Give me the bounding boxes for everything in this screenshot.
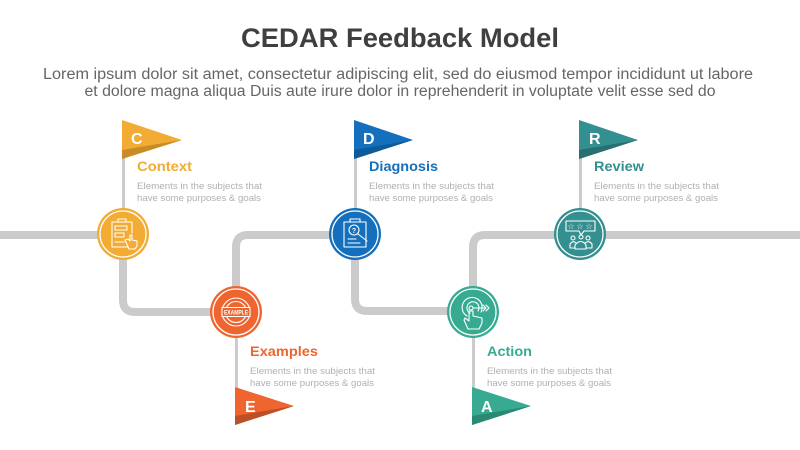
flag C: C (131, 131, 143, 148)
description: Elements in the subjects that (369, 181, 494, 192)
heading Diagnosis: Diagnosis (369, 158, 438, 174)
icon: example stamp: EXAMPLE (224, 310, 249, 316)
icon: clipboard with magnifier: ? (352, 228, 356, 235)
icon: star ratings and people: ☆ (567, 222, 575, 231)
icon: star ratings and people: ☆ (585, 222, 593, 231)
icon: clipboard with hand (97, 208, 149, 260)
icon: star ratings and people: ☆ (576, 222, 584, 231)
flag E (235, 387, 294, 425)
description: have some purposes & goals (594, 193, 718, 204)
description: have some purposes & goals (250, 378, 374, 389)
heading Examples: Examples (250, 343, 318, 359)
flag D: D (363, 131, 375, 148)
description (369, 181, 494, 204)
description: have some purposes & goals (487, 378, 611, 389)
flag A: A (481, 399, 493, 416)
subtitle text block (43, 66, 753, 100)
icon: clipboard with magnifier (329, 208, 381, 260)
icon: target with pointing hand (447, 286, 499, 338)
panel: Action (447, 286, 612, 425)
description (250, 366, 375, 389)
panel: Context (97, 120, 262, 260)
panel: Diagnosis (329, 120, 494, 260)
description (487, 366, 612, 389)
heading Action: Action (487, 343, 532, 359)
title: CEDAR Feedback Model (241, 23, 559, 53)
flag R (579, 120, 638, 159)
description: have some purposes & goals (369, 193, 493, 204)
flag C (122, 120, 182, 159)
panel: Review (554, 120, 719, 260)
icon: example stamp (210, 286, 262, 338)
description: have some purposes & goals (137, 193, 261, 204)
description (137, 181, 262, 204)
flag R: R (589, 131, 601, 148)
flag E: E (245, 399, 256, 416)
winding timeline path (0, 235, 800, 312)
description: Elements in the subjects that (250, 366, 375, 377)
description (594, 181, 719, 204)
subtitle text block: Lorem ipsum dolor sit amet, consectetur adipiscing elit, sed do eiusmod tempor incididunt ut labore (43, 66, 753, 83)
heading Context: Context (137, 158, 192, 174)
heading Review: Review (594, 158, 644, 174)
description: Elements in the subjects that (137, 181, 262, 192)
description: Elements in the subjects that (487, 366, 612, 377)
flag A (472, 387, 531, 425)
description: Elements in the subjects that (594, 181, 719, 192)
icon: star ratings and people (554, 208, 606, 260)
subtitle text block: et dolore magna aliqua Duis aute irure dolor in reprehenderit in voluptate velit esse sed do (84, 83, 715, 100)
panel: Examples (210, 286, 375, 425)
flag D (354, 120, 413, 159)
